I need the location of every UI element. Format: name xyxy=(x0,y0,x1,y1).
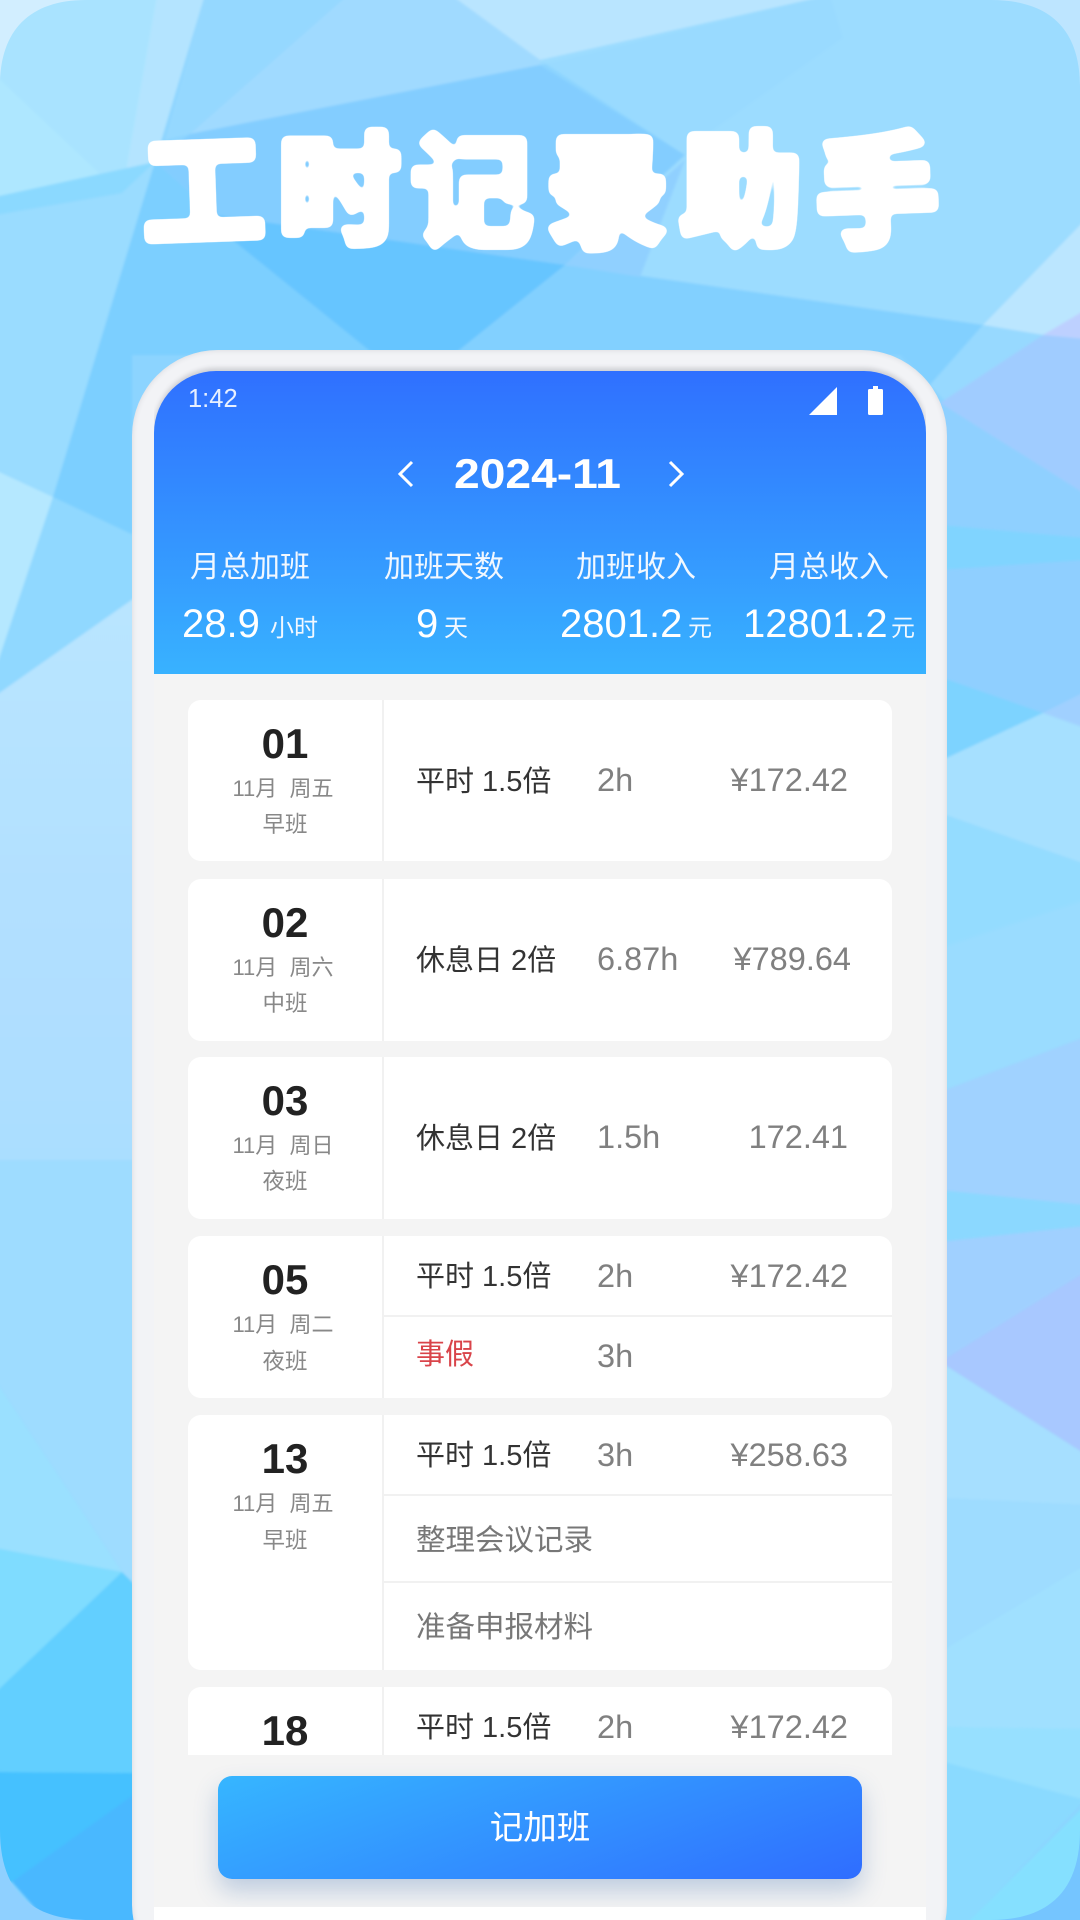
card: day 02: ¥789.64 xyxy=(734,940,851,976)
card: day 13: 3h xyxy=(597,1437,633,1473)
button: log overtime xyxy=(218,1776,862,1878)
bottom white bar xyxy=(154,1907,926,1920)
card: day 03: 1.5h xyxy=(597,1119,660,1155)
phone frame xyxy=(132,350,947,1920)
card: day 01: ¥172.42 xyxy=(731,762,848,798)
card: day 03: 11月 周日 xyxy=(232,1133,334,1158)
card: day 05: ¥172.42 xyxy=(731,1258,848,1294)
card: day 03: 夜班 xyxy=(262,1169,308,1194)
stat: overtime income label: 加班收入 xyxy=(576,551,696,584)
stat value: 9: 9 xyxy=(416,602,438,646)
card: day 13: 准备申报材料 xyxy=(416,1611,593,1644)
card: day 13: 早班 xyxy=(262,1528,308,1553)
header panel xyxy=(154,371,926,674)
card: day 05: 2h xyxy=(597,1258,633,1294)
card: day 05: 事假 xyxy=(416,1339,474,1371)
card: day 05: 3h xyxy=(597,1338,633,1374)
stat: monthly overtime label: 月总加班 xyxy=(190,551,310,584)
phone screen xyxy=(154,371,926,1920)
card: day 13: 平时 1.5倍 xyxy=(416,1440,551,1472)
card: day 18 (clipped): ¥172.42 xyxy=(731,1709,848,1745)
stat unit: yuan: 元 xyxy=(688,615,712,642)
card: day 13: 整理会议记录 xyxy=(416,1524,593,1557)
card: day 02: 休息日 2倍 xyxy=(416,944,556,976)
icon: battery xyxy=(868,386,883,415)
card: day 01: 早班 xyxy=(262,812,308,837)
card: day 13: 13 xyxy=(262,1435,308,1482)
title: 录 xyxy=(546,100,668,273)
card: day 01 xyxy=(188,700,892,861)
icon: next month arrow xyxy=(669,461,684,487)
stat value: 12801.2: 12801.2 xyxy=(743,602,888,646)
card: day 01: 平时 1.5倍 xyxy=(416,766,551,798)
card: day 13: ¥258.63 xyxy=(731,1437,848,1473)
icon: signal xyxy=(809,387,837,415)
stat value: 2801.2: 2801.2 xyxy=(560,602,682,646)
card: day 01: 01 xyxy=(262,720,308,767)
card: day 18 (clipped): 平时 1.5倍 xyxy=(416,1712,551,1744)
card: day 13 xyxy=(188,1415,892,1670)
title xyxy=(139,100,941,274)
button: log overtime: 记加班 xyxy=(490,1810,590,1847)
card: day 03: 172.41 xyxy=(749,1119,848,1155)
card: day 01: 2h xyxy=(597,762,633,798)
stat value: 28.9: 28.9 xyxy=(182,602,260,646)
card: day 18 (clipped): 18 xyxy=(262,1707,308,1754)
card: day 02 xyxy=(188,878,892,1040)
card: day 02: 6.87h xyxy=(597,940,678,976)
card: day 13: 11月 周五 xyxy=(232,1491,334,1516)
month heading: 2024-11 xyxy=(454,450,621,497)
title: 记 xyxy=(411,100,533,272)
card: day 03 xyxy=(188,1057,892,1219)
card: day 03: 休息日 2倍 xyxy=(416,1123,556,1155)
card: day 18 (clipped): 2h xyxy=(597,1709,633,1745)
stat: monthly income label: 月总收入 xyxy=(769,551,889,584)
card: day 18 (clipped) xyxy=(188,1687,892,1755)
stat unit: yuan: 元 xyxy=(891,615,915,642)
card: day 05: 平时 1.5倍 xyxy=(416,1261,551,1293)
card: day 02: 中班 xyxy=(262,990,308,1016)
status bar time: 1:42 xyxy=(188,385,238,413)
card: day 02: 02 xyxy=(262,898,308,946)
card: day 05: 夜班 xyxy=(262,1349,308,1374)
card: day 03: 03 xyxy=(262,1077,308,1124)
icon: previous month arrow xyxy=(398,461,413,487)
card: day 02: 11月 周六 xyxy=(232,954,334,980)
stat: overtime days label: 加班天数 xyxy=(384,551,504,584)
stat unit: hours: 小时 xyxy=(270,615,318,642)
card: day 05: 05 xyxy=(262,1256,308,1303)
card: day 05 xyxy=(188,1236,892,1398)
stat unit: days: 天 xyxy=(444,615,468,642)
card: day 05: 11月 周二 xyxy=(232,1312,334,1337)
card: day 01: 11月 周五 xyxy=(232,776,334,801)
